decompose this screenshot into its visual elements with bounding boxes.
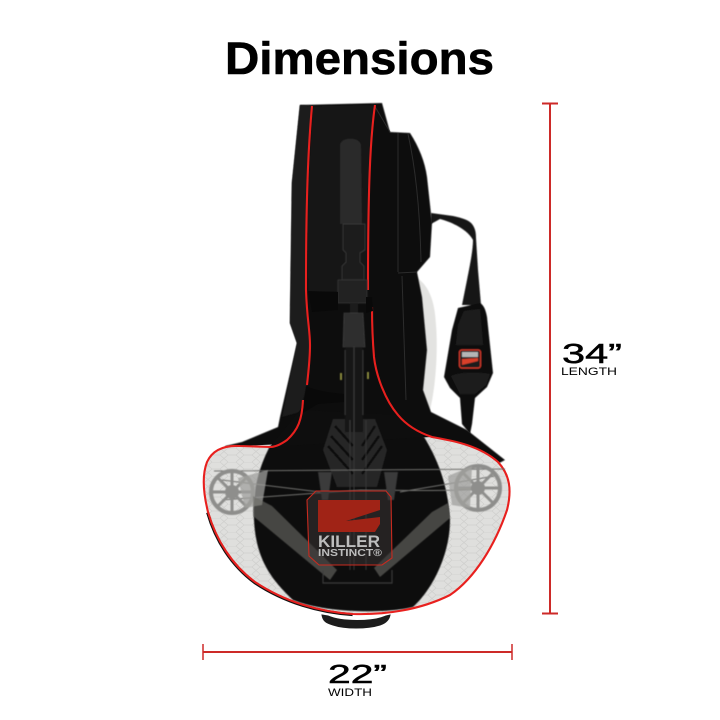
length dimension line	[542, 103, 558, 614]
length label: LENGTH	[561, 366, 617, 378]
left cam	[211, 470, 268, 513]
left side panel	[282, 105, 312, 417]
riser and stirrup	[323, 570, 392, 583]
length label: 34”	[562, 338, 622, 369]
body to panel fill	[270, 410, 424, 447]
left limb	[253, 496, 337, 580]
crossbow case	[204, 103, 510, 628]
width label	[328, 659, 387, 699]
killer instinct logo: INSTINCT®	[318, 547, 382, 559]
outer dark edge of wing	[208, 513, 353, 615]
width dimension line	[203, 644, 512, 660]
red piping	[204, 105, 510, 614]
width label: 22”	[328, 659, 387, 689]
right limb	[374, 503, 450, 577]
killer instinct logo: KILLER	[318, 533, 380, 551]
stock shape	[323, 419, 387, 487]
shoulder strap	[431, 213, 493, 434]
strap logo patch	[460, 350, 480, 368]
case body	[225, 103, 505, 500]
body centre shading	[307, 105, 374, 292]
crossbow limbs and cams	[211, 466, 505, 583]
killer instinct logo	[307, 491, 392, 565]
white back panel edge	[410, 276, 437, 420]
length label	[561, 338, 622, 378]
scope and barrel	[338, 139, 368, 570]
carry handle	[322, 615, 390, 628]
case straps	[303, 291, 373, 413]
center black panel	[254, 433, 450, 611]
wing base	[204, 437, 510, 614]
title: Dimensions	[225, 33, 494, 84]
pocket seams	[374, 105, 421, 400]
right cam	[448, 466, 500, 510]
width label: WIDTH	[328, 687, 372, 699]
